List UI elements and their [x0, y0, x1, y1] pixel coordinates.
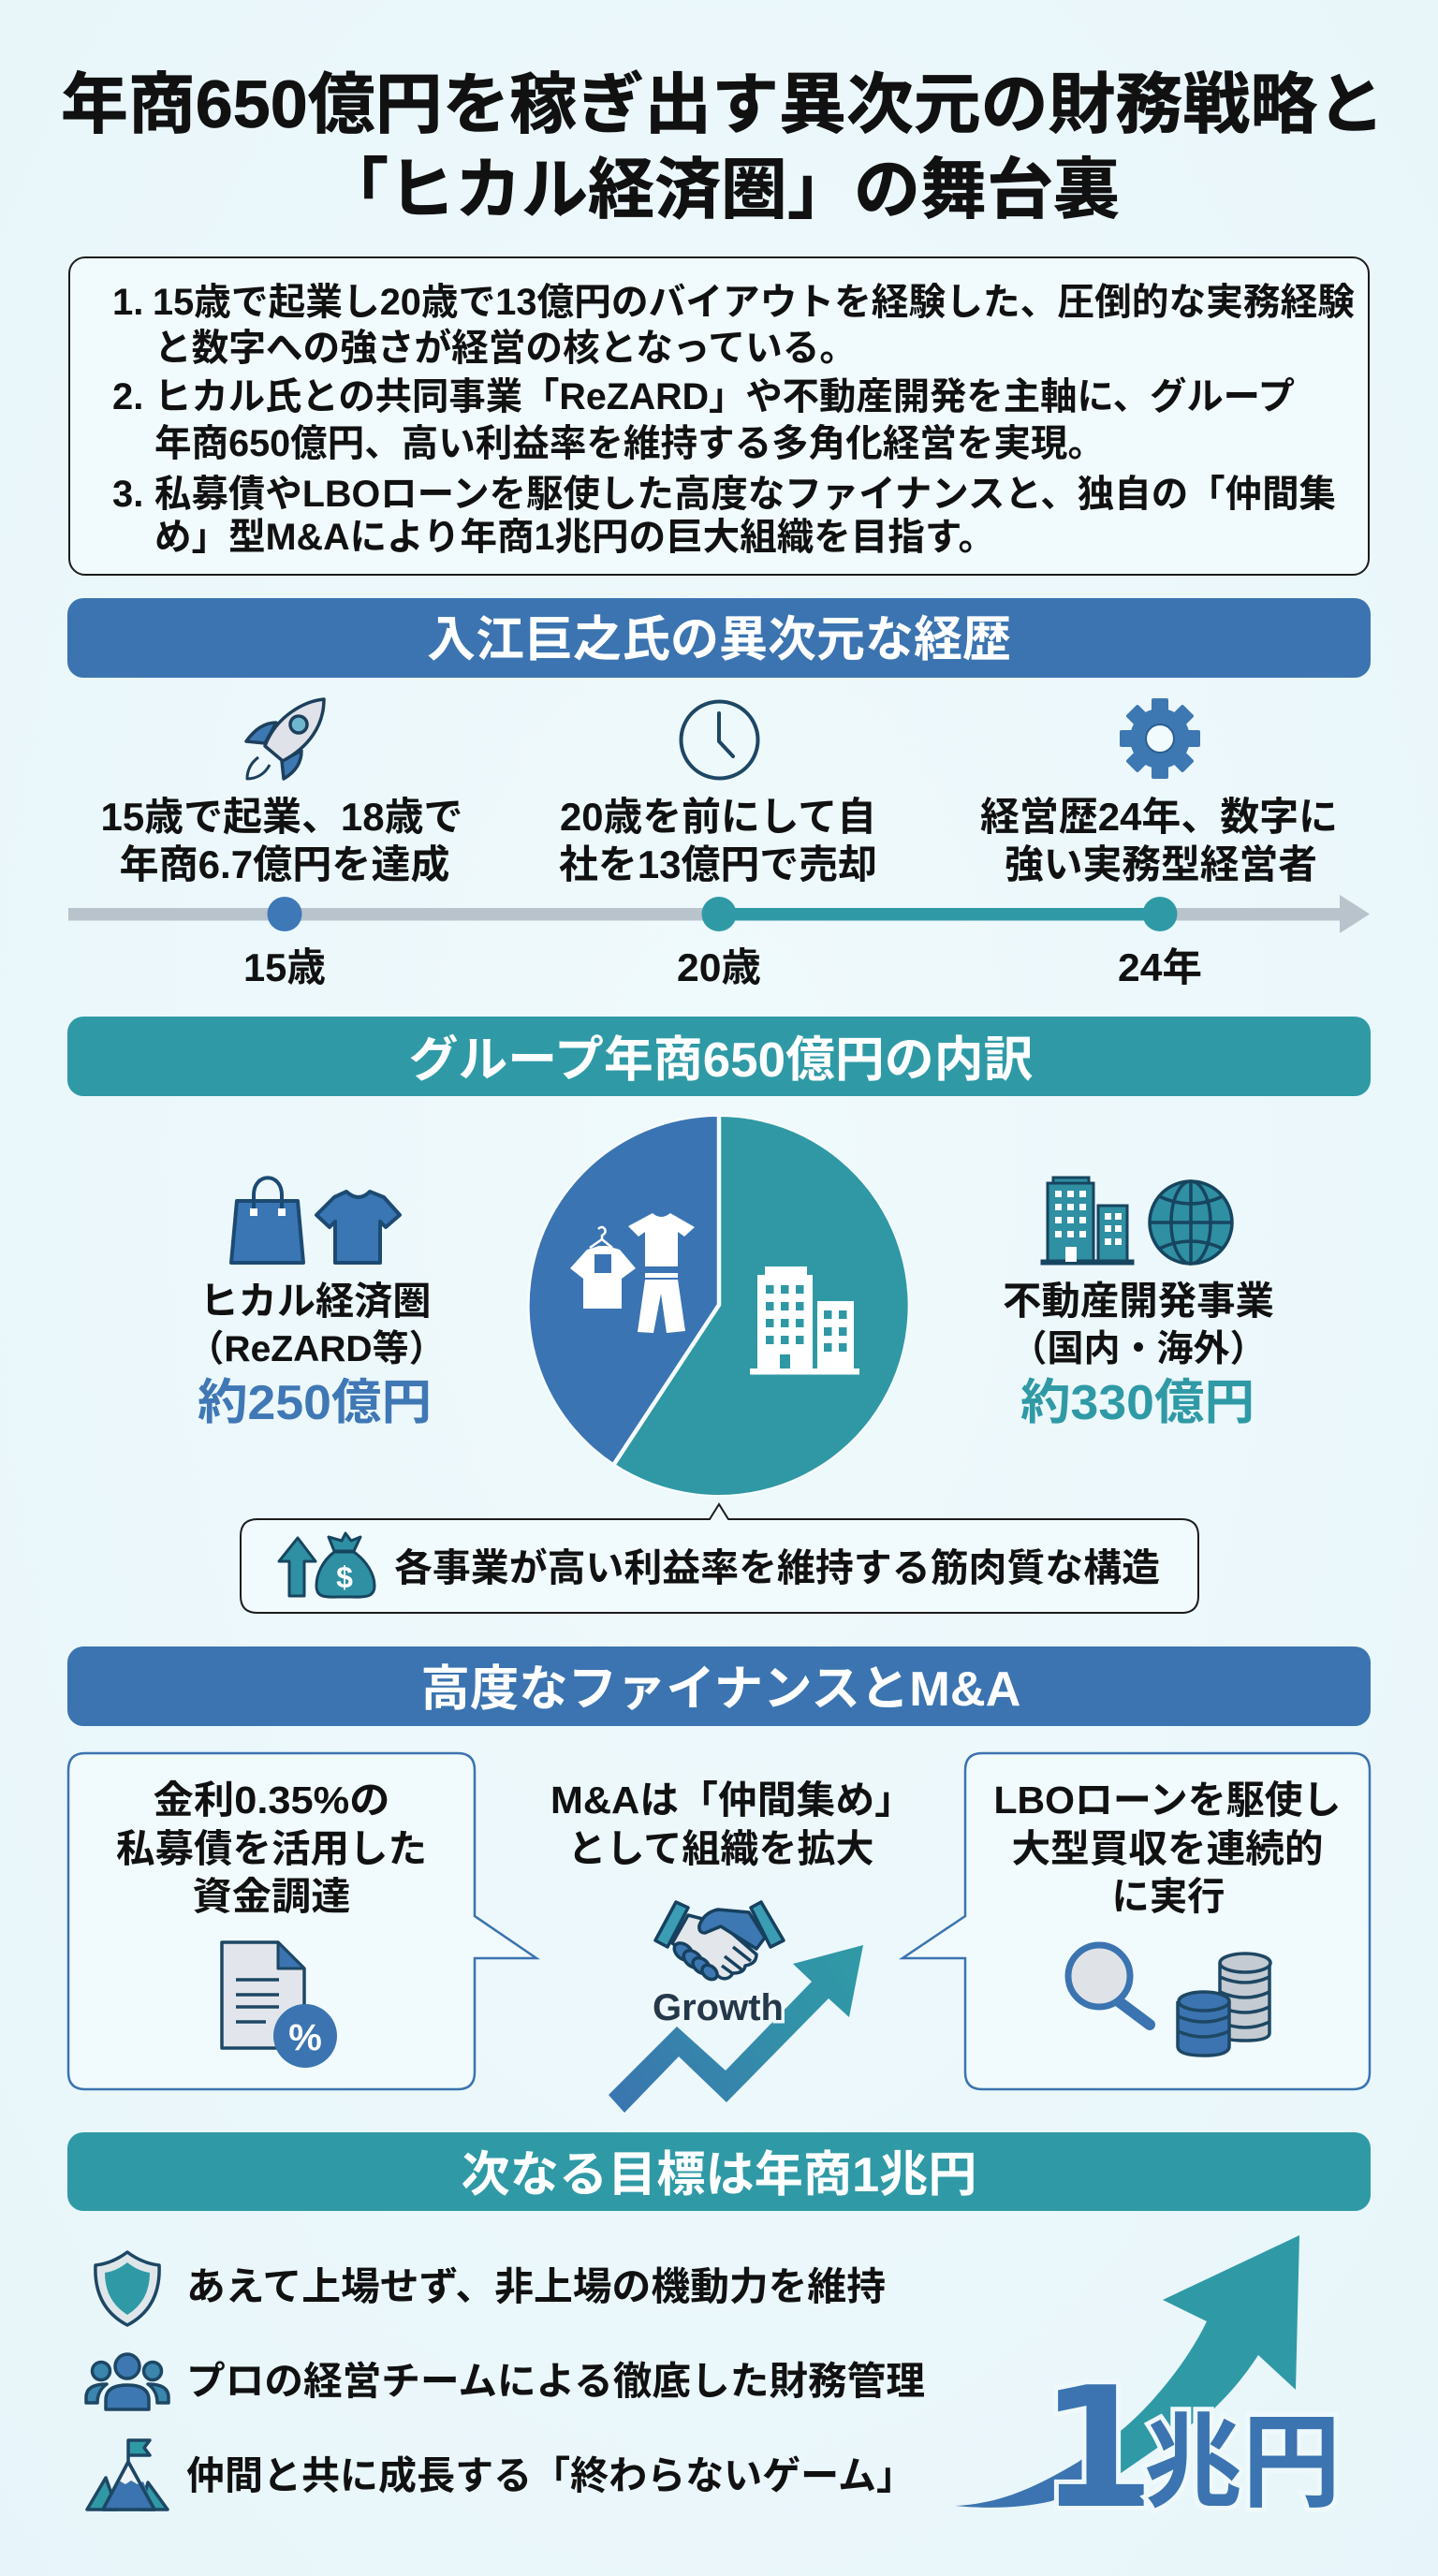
callout: high margin [241, 1504, 1198, 1613]
text: stay private: あえて上場せず、非上場の機動力を維持 [186, 2264, 886, 2308]
text: real estate: 不動産開発事業 [1003, 1279, 1274, 1323]
icon: office buildings [1042, 1178, 1133, 1264]
icon: globe [1150, 1181, 1232, 1264]
icon: gear [1120, 698, 1200, 779]
text: 1: 1 [1039, 2351, 1155, 2545]
text: Hikaru economy: （ReZARD等） [187, 1329, 446, 1369]
panel: summary list: 2. [112, 376, 143, 417]
icon: building in pie [750, 1266, 859, 1374]
panel: private bonds: 私募債を活用した [116, 1827, 427, 1870]
text: milestone 2: 20歳を前にして自 [560, 795, 876, 839]
text: milestone 3: 強い実務型経営者 [1005, 842, 1317, 886]
heading: finance and M&A [67, 1647, 1371, 1726]
text: M&A [550, 1778, 914, 1870]
panel: LBO loan: に実行 [1112, 1875, 1225, 1918]
text: milestone 3: 経営歴24年、数字に [980, 795, 1338, 839]
panel: summary list: 私募債やLBOローンを駆使した高度なファイナンスと、独自の「仲間集 [154, 474, 1336, 515]
panel: summary list [69, 257, 1369, 575]
text: milestone 1: 年商6.7億円を達成 [120, 842, 449, 886]
icon: t-shirt [316, 1192, 400, 1263]
text: milestone 2 [559, 795, 877, 886]
icon: arrow and money bag: $ [336, 1560, 353, 1594]
icon: handshake [655, 1902, 784, 1983]
title: 年商650億円を稼ぎ出す異次元の財務戦略と [61, 68, 1385, 142]
heading: next goal [67, 2132, 1371, 2211]
text: M&A: として組織を拡大 [567, 1827, 874, 1870]
heading: revenue breakdown [67, 1017, 1371, 1096]
timeline labels: 20歳 [677, 945, 761, 989]
heading: revenue breakdown: グループ年商650億円の内訳 [408, 1033, 1034, 1088]
text: milestone 1 [101, 795, 462, 886]
text: Growth: Growth [653, 1987, 784, 2028]
icon: clock [682, 702, 758, 779]
pie chart [527, 1115, 909, 1497]
heading: career [67, 598, 1371, 678]
icon: team [86, 2354, 169, 2409]
heading: career: 入江巨之氏の異次元な経歴 [427, 613, 1011, 667]
timeline arrow [68, 895, 1370, 933]
timeline labels [243, 945, 1202, 989]
panel: summary list: と数字への強さが経営の核となっている。 [154, 328, 857, 369]
text: milestone 2: 社を13億円で売却 [559, 842, 877, 886]
icon: shopping bag [231, 1178, 303, 1263]
panel: private bonds: 資金調達 [193, 1875, 350, 1918]
text: endless game: 仲間と共に成長する「終わらないゲーム」 [186, 2453, 915, 2497]
icon: arrow and money bag [279, 1533, 374, 1597]
panel: summary list: 1. [112, 282, 143, 323]
text: Hikaru economy: ヒカル経済圏 [200, 1280, 431, 1323]
arrow: growth [609, 1945, 863, 2113]
title [61, 68, 1385, 227]
panel: summary list: ヒカル氏との共同事業「ReZARD」や不動産開発を主軸に、グループ [154, 376, 1295, 417]
text: real estate: 約330億円 [1020, 1376, 1255, 1430]
timeline labels: 15歳 [243, 945, 326, 989]
icon: shield [95, 2252, 159, 2325]
panel: summary list: 3. [112, 474, 143, 515]
icon: document with percent [222, 1942, 337, 2068]
icon: clothes in pie [570, 1213, 695, 1333]
panel: LBO loan [902, 1753, 1370, 2089]
callout: high margin: 各事業が高い利益率を維持する筋肉質な構造 [394, 1546, 1160, 1589]
text: Hikaru economy: 約250億円 [198, 1376, 432, 1430]
timeline labels: 24年 [1118, 945, 1202, 989]
heading: next goal: 次なる目標は年商1兆円 [461, 2148, 977, 2203]
text: M&A: M&Aは「仲間集め」 [550, 1778, 914, 1822]
icon: document with percent: % [288, 2017, 322, 2058]
icon: magnifier and coins [1068, 1945, 1270, 2056]
icon: rocket [246, 699, 324, 779]
panel: private bonds [68, 1753, 536, 2089]
icon: mountain flag [87, 2440, 168, 2510]
panel: private bonds: 金利0.35%の [154, 1778, 389, 1822]
text: real estate [1003, 1279, 1274, 1430]
heading: finance and M&A: 高度なファイナンスとM&A [421, 1662, 1020, 1717]
text: Hikaru economy [187, 1280, 446, 1430]
panel: LBO loan: 大型買収を連続的 [1011, 1827, 1324, 1870]
text: 兆円: 兆円 [1144, 2406, 1341, 2521]
text: milestone 3 [980, 795, 1338, 886]
graphic: one trillion yen arrow [955, 2235, 1341, 2545]
text: milestone 1: 15歳で起業、18歳で [101, 795, 462, 839]
text: real estate: （国内・海外） [1010, 1329, 1267, 1369]
panel: summary list: め」型M&Aにより年商1兆円の巨大組織を目指す。 [154, 517, 995, 558]
title: 「ヒカル経済圏」の舞台裏 [322, 154, 1120, 227]
panel: summary list: 年商650億円、高い利益率を維持する多角化経営を実現。 [154, 423, 1105, 464]
panel: summary list: 15歳で起業し20歳で13億円のバイアウトを経験した、圧倒的な実務経験 [153, 282, 1355, 323]
panel: LBO loan: LBOローンを駆使し [994, 1778, 1341, 1822]
text: pro team: プロの経営チームによる徹底した財務管理 [186, 2359, 925, 2403]
